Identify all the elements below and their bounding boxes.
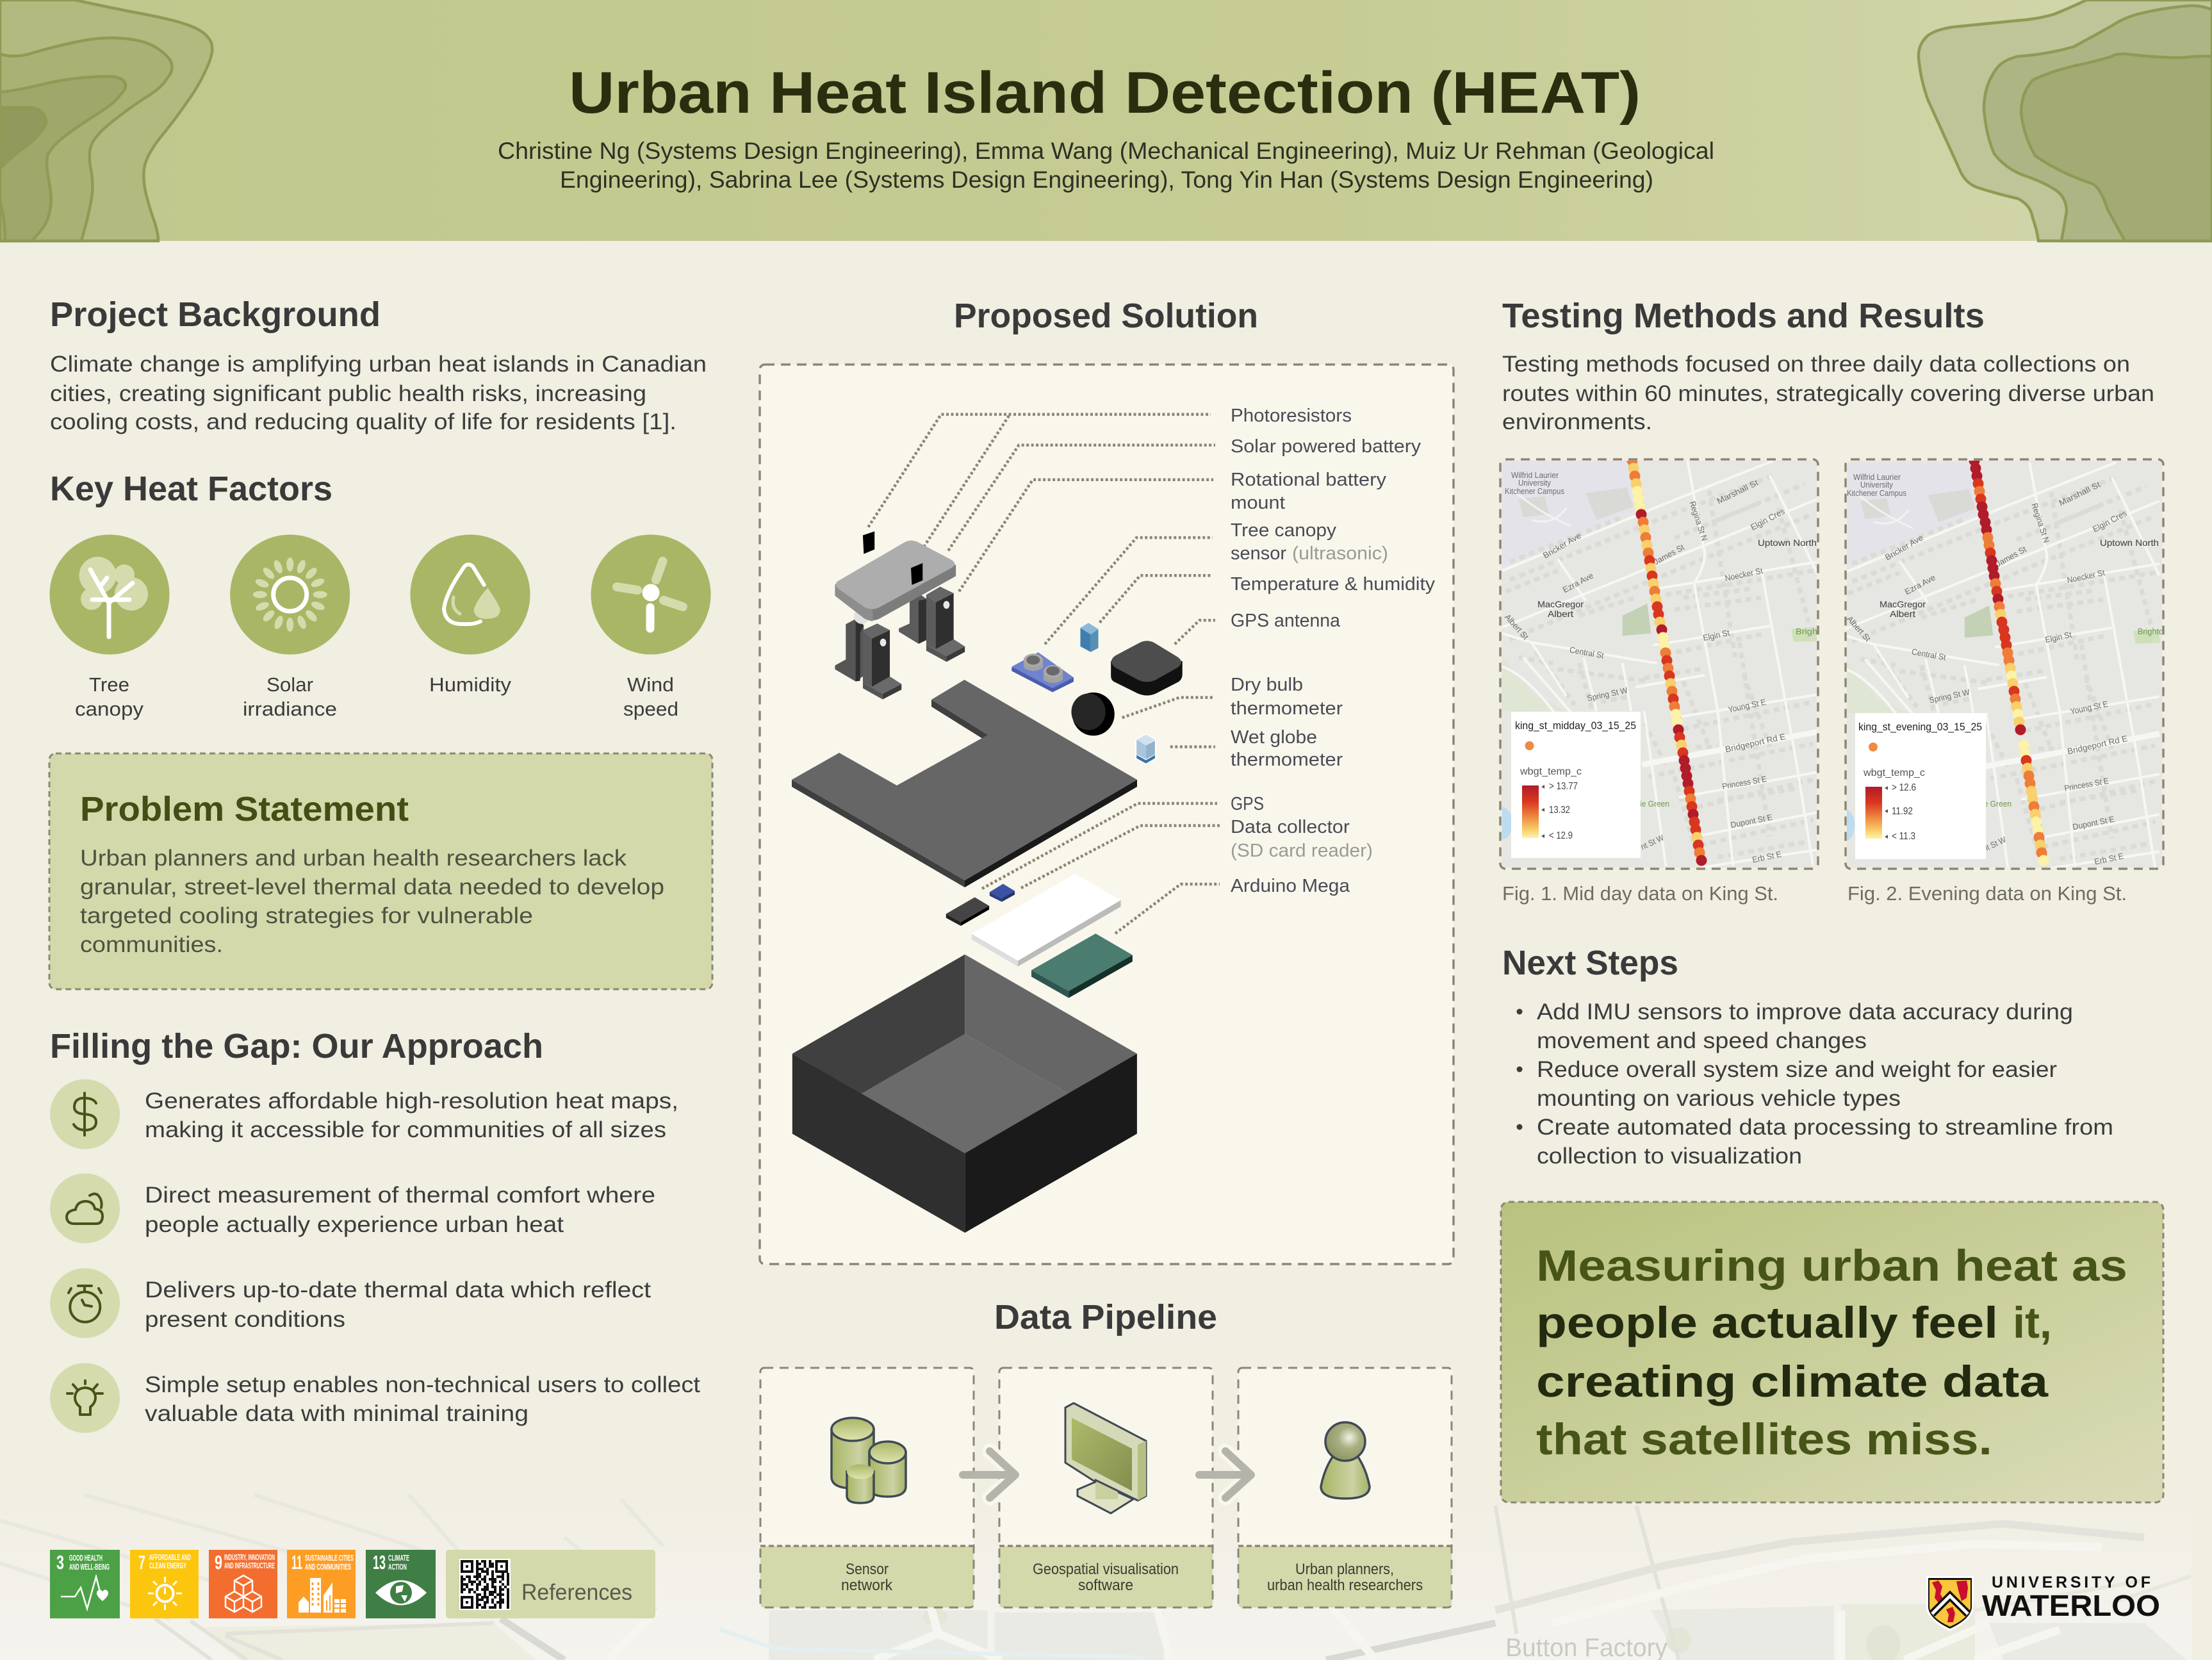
GPS antenna <box>1111 641 1183 696</box>
panel: our approach <box>50 1027 700 1433</box>
map labels: Noecker St <box>2066 568 2106 585</box>
internal components <box>792 874 1137 1233</box>
label: Urban planners, <box>1295 1561 1394 1578</box>
map labels: Dupont St E <box>2072 814 2115 832</box>
panel: problem statement <box>49 753 712 989</box>
step: end users <box>1238 1368 1452 1607</box>
bullet list: mounting on various vehicle types <box>1537 1086 1901 1111</box>
icon: solar irradiance <box>230 534 350 655</box>
authors <box>498 138 1714 193</box>
text: affordable: making it accessible for communities of all sizes <box>145 1117 666 1142</box>
caption: figure 2: Fig. 2. Evening data on King St. <box>1847 882 2127 905</box>
icon: tree canopy <box>50 534 169 655</box>
callout: key message: people actually feel <box>1536 1298 1998 1347</box>
heading: data pipeline: Data Pipeline <box>994 1298 1217 1336</box>
map labels: Albert St <box>1503 612 1531 641</box>
map labels: Dupont St E <box>1730 812 1773 830</box>
front right leg <box>926 587 965 662</box>
component labels <box>1231 406 1436 896</box>
map labels: Spring St W <box>1928 687 1971 705</box>
caption: figure 1: Fig. 1. Mid day data on King St. <box>1502 882 1778 905</box>
text: up-to-date <box>145 1278 651 1332</box>
bullet list: Add IMU sensors to improve data accuracy during <box>1537 999 2073 1024</box>
map labels: Bricker Ave <box>1541 530 1583 560</box>
text: up-to-date: Delivers up-to-date thermal data which reflect <box>145 1278 651 1303</box>
badge: SDG 11: 11 <box>291 1551 302 1574</box>
map labels: Regina St N <box>1688 500 1710 542</box>
component labels: GPS <box>1231 794 1264 814</box>
map labels: Central St <box>1569 645 1605 661</box>
map labels: MacGregor <box>1537 599 1584 609</box>
label: Geospatial visualisation <box>1033 1561 1179 1578</box>
map labels: Kitchener Campus <box>1847 488 1906 498</box>
map labels: ie Green <box>1982 799 2011 809</box>
front left leg <box>863 623 901 700</box>
paragraph <box>50 352 707 434</box>
callout: key message: that satellites miss. <box>1536 1415 1992 1464</box>
Arduino Mega <box>1031 933 1133 998</box>
component labels: Rotational battery <box>1231 470 1387 490</box>
map labels: Marshall St <box>1715 477 1760 506</box>
component labels: mount <box>1231 493 1285 513</box>
temperature route <box>1627 455 1707 866</box>
bullet list: collection to visualization <box>1537 1144 1802 1169</box>
panel: next steps <box>1502 944 2113 1169</box>
label <box>841 1561 893 1594</box>
step: sensor network <box>760 1368 974 1607</box>
map labels: University <box>1860 480 1893 489</box>
icon: dollar <box>50 1079 120 1149</box>
paragraph: Testing methods focused on three daily data collections on <box>1502 352 2130 377</box>
problem text <box>80 846 664 957</box>
icon: person <box>1321 1422 1370 1499</box>
legend <box>1511 712 1641 858</box>
GPS module <box>946 897 989 926</box>
leader lines <box>868 415 1215 747</box>
badge: SDG 9: AND INFRASTRUCTURE <box>224 1561 275 1570</box>
problem text: targeted cooling strategies for vulnerable <box>80 903 533 928</box>
icon: light bulb <box>50 1363 120 1433</box>
arrow: software to users <box>1199 1451 1251 1498</box>
badge: SDG 11: SUSTAINABLE CITIES <box>305 1553 354 1563</box>
label: solar irradiance: irradiance <box>243 698 337 720</box>
badge: SDG 7 <box>130 1550 199 1618</box>
map labels: nt St W <box>1639 832 1666 851</box>
map labels: Ezra Ave <box>1561 571 1595 595</box>
temperature route <box>1969 455 2049 866</box>
legend: > 12.6 <box>1892 782 1916 793</box>
map labels: Princess St E <box>2063 776 2110 793</box>
component labels: (ultrasonic) <box>1292 543 1388 564</box>
legend: > 13.77 <box>1549 781 1578 792</box>
badge: SDG 3: AND WELL-BEING <box>69 1562 110 1572</box>
map labels: Spring St W <box>1586 685 1629 703</box>
mount assembly <box>835 531 965 700</box>
panel: project background <box>50 295 707 434</box>
panel: testing methods <box>1502 297 2154 434</box>
map labels: Bridgeport Rd E <box>1725 732 1787 754</box>
badge: SDG 11 <box>287 1550 356 1618</box>
arrow: sensors to software <box>963 1451 1015 1498</box>
map labels <box>1503 470 1820 865</box>
map labels: Albert St <box>1845 614 1873 643</box>
label: solar irradiance <box>243 673 337 720</box>
map labels: Bridgeport Rd E <box>2067 734 2129 756</box>
text: direct measurement <box>145 1183 655 1237</box>
component labels: sensor <box>1231 543 1286 564</box>
panel: data pipeline flow <box>760 1368 1452 1607</box>
component labels: Dry bulb <box>1231 675 1303 695</box>
map labels: Bricker Ave <box>1883 532 1925 562</box>
badge: SDG 9: INDUSTRY, INNOVATION <box>224 1552 275 1562</box>
map labels: nt St W <box>1981 834 2008 853</box>
label <box>1033 1561 1179 1594</box>
badge: SDG 7: 7 <box>138 1551 145 1574</box>
label: humidity: Humidity <box>429 673 512 696</box>
bullet list <box>1517 999 2113 1169</box>
map labels: Wilfrid Laurier <box>1853 472 1901 482</box>
dry bulb thermometer <box>1071 693 1115 735</box>
map labels: Erb St E <box>1751 849 1782 865</box>
heading: Problem Statement <box>80 790 409 828</box>
heading: Filling the Gap: Our Approach <box>50 1027 543 1065</box>
map labels <box>1845 472 2163 867</box>
icon: humidity <box>410 534 530 655</box>
component labels: Temperature & humidity <box>1231 574 1436 595</box>
component labels: thermometer <box>1231 698 1343 719</box>
badge: SDG 3: 3 <box>56 1551 64 1574</box>
callout: key message: it, <box>2013 1298 2052 1347</box>
badge: SDG 13: 13 <box>373 1551 386 1574</box>
component labels: GPS antenna <box>1231 611 1341 631</box>
legend: 13.32 <box>1549 805 1570 816</box>
component labels: Data collector <box>1231 817 1350 837</box>
label: tree canopy: canopy <box>75 698 144 720</box>
component labels: Arduino Mega <box>1231 876 1350 896</box>
badge: SDG 3 <box>50 1550 120 1618</box>
map labels: MacGregor <box>1880 599 1926 609</box>
logo: University of Waterloo: WATERLOO <box>1982 1589 2160 1622</box>
ultrasonic sensor <box>1012 652 1074 692</box>
panel: key heat factors <box>50 470 711 720</box>
map labels: Elgin Cres <box>1749 506 1787 532</box>
map labels: Princess St E <box>1721 774 1767 791</box>
text: simple setup: Simple setup enables non-technical users to collect <box>145 1372 700 1397</box>
QR code <box>459 1559 511 1610</box>
text: direct measurement: people actually experience urban heat <box>145 1212 564 1237</box>
legend: king_st_midday_03_15_25 <box>1515 719 1636 732</box>
text: up-to-date: present conditions <box>145 1307 345 1332</box>
references label: References <box>521 1580 632 1605</box>
map labels: Marshall St <box>2057 479 2102 508</box>
map labels: ie Green <box>1640 799 1669 809</box>
label: wind speed <box>623 673 678 720</box>
problem text: Urban planners and urban health researchers lack <box>80 846 627 871</box>
step: geospatial software <box>999 1368 1213 1607</box>
text: simple setup: valuable data with minimal training <box>145 1401 528 1426</box>
wet globe thermometer <box>1136 735 1155 764</box>
map: midday King St <box>1499 458 1819 870</box>
crest <box>1926 1576 1974 1631</box>
temperature humidity sensor <box>1080 623 1099 652</box>
base plate <box>792 680 1137 887</box>
badge: SDG 13: ACTION <box>388 1562 407 1572</box>
component labels: Solar powered battery <box>1231 436 1421 457</box>
map labels: James St <box>1994 544 2028 569</box>
references card <box>446 1550 655 1618</box>
logo: University of Waterloo <box>1926 1574 2160 1631</box>
title: Urban Heat Island Detection (HEAT) <box>569 60 1641 126</box>
heading: Key Heat Factors <box>50 470 332 508</box>
callout: key message <box>1501 1202 2163 1502</box>
icon: cylinders <box>832 1418 906 1503</box>
text: simple setup <box>145 1372 700 1426</box>
topographic contours right <box>1919 0 2212 241</box>
sensors <box>1012 623 1183 764</box>
label: software <box>1078 1577 1133 1594</box>
badge: SDG 7: CLEAN ENERGY <box>149 1561 186 1570</box>
component labels: Photoresistors <box>1231 406 1352 426</box>
paragraph: routes within 60 minutes, strategically covering diverse urban <box>1502 381 2154 406</box>
label: tree canopy <box>75 673 144 720</box>
background street map <box>0 1493 2192 1660</box>
bullet list: movement and speed changes <box>1537 1028 1867 1053</box>
label: Sensor <box>846 1561 889 1578</box>
label: wind speed: speed <box>623 698 678 720</box>
badge: SDG 9: 9 <box>215 1551 222 1574</box>
label: urban health researchers <box>1267 1577 1423 1594</box>
map labels: Elgin St <box>2044 630 2073 645</box>
component labels: Tree canopy <box>1231 520 1337 541</box>
legend: wbgt_temp_c <box>1863 768 1925 778</box>
header banner <box>0 0 2212 241</box>
badge: SDG 3: GOOD HEALTH <box>69 1553 102 1563</box>
text: direct measurement: Direct measurement of thermal comfort where <box>145 1183 655 1208</box>
icon: wind speed <box>591 534 711 655</box>
SD card reader <box>990 883 1015 902</box>
component labels: thermometer <box>1231 750 1343 770</box>
callout: key message: creating climate data <box>1536 1357 2049 1406</box>
map labels: James St <box>1652 542 1686 567</box>
solar battery plate <box>835 541 956 621</box>
legend <box>1855 713 1986 859</box>
paragraph: environments. <box>1502 409 1652 434</box>
map labels: Uptown North <box>2100 538 2159 548</box>
map labels: Central St <box>1911 646 1947 662</box>
map labels: Kitchener Campus <box>1505 486 1564 496</box>
topographic contours left <box>0 0 212 241</box>
heading: Project Background <box>50 295 381 334</box>
photoresistors <box>863 531 922 585</box>
badge: SDG 13 <box>366 1550 436 1618</box>
component labels: (SD card reader) <box>1231 841 1373 861</box>
label: solar irradiance: Solar <box>266 673 313 696</box>
map labels: Albert <box>1548 609 1573 619</box>
heading: Next Steps <box>1502 944 1678 982</box>
icon: monitor <box>1065 1403 1146 1513</box>
map labels: Bright <box>1796 627 1820 636</box>
wordmark: UNIVERSITY OF <box>1992 1574 2151 1591</box>
bullet list: Reduce overall system size and weight for easier <box>1537 1057 2057 1082</box>
badge: SDG 9 <box>209 1550 277 1618</box>
map labels: Young St E <box>1727 697 1767 714</box>
SDG badges <box>50 1550 655 1618</box>
badge: SDG 7: AFFORDABLE AND <box>149 1552 191 1562</box>
map labels: Elgin St <box>1702 628 1731 643</box>
white battery <box>972 874 1121 966</box>
authors: Engineering), Sabrina Lee (Systems Design Engineering), Tong Yin Han (Systems Design Engineering) <box>560 167 1653 193</box>
legend: < 12.9 <box>1549 830 1573 841</box>
panel: exploded device diagram <box>760 365 1454 1264</box>
legend: 11.92 <box>1892 806 1913 817</box>
legend: wbgt_temp_c <box>1520 766 1582 777</box>
rear legs <box>835 594 927 682</box>
label: network <box>841 1577 893 1594</box>
map labels: Young St E <box>2069 699 2109 716</box>
map labels: Ezra Ave <box>1903 573 1937 596</box>
legend: < 11.3 <box>1892 831 1915 842</box>
text: affordable <box>145 1089 678 1142</box>
paragraph: Climate change is amplifying urban heat islands in Canadian <box>50 352 707 377</box>
map labels: Albert <box>1890 609 1915 619</box>
icon: stopwatch <box>50 1269 120 1338</box>
callout: key message: Measuring urban heat as <box>1536 1241 2127 1290</box>
legend: king_st_evening_03_15_25 <box>1858 721 1982 733</box>
paragraph: cooling costs, and reducing quality of life for residents [1]. <box>50 409 676 434</box>
problem text: granular, street-level thermal data needed to develop <box>80 875 664 900</box>
problem text: communities. <box>80 932 223 957</box>
component labels: Wet globe <box>1231 727 1317 748</box>
map: evening King St <box>1844 458 2165 870</box>
label: tree canopy: Tree <box>89 673 129 696</box>
paragraph: cities, creating significant public health risks, increasing <box>50 381 646 406</box>
map labels: Wilfrid Laurier <box>1511 470 1559 480</box>
heading: proposed solution: Proposed Solution <box>954 297 1258 335</box>
label: wind speed: Wind <box>627 673 674 696</box>
text: affordable: Generates affordable high-resolution heat maps, <box>145 1089 678 1114</box>
map labels: Uptown North <box>1758 538 1817 548</box>
map labels: Noecker St <box>1724 566 1764 583</box>
enclosure box <box>792 955 1137 1233</box>
map labels: Brighto <box>2138 627 2163 636</box>
icon: cloud <box>50 1174 120 1243</box>
label <box>1267 1561 1423 1594</box>
heading: Testing Methods and Results <box>1502 297 1985 335</box>
map labels: Elgin Cres <box>2091 508 2129 534</box>
badge: SDG 13: CLIMATE <box>388 1553 409 1563</box>
bullet list: Create automated data processing to streamline from <box>1537 1115 2113 1140</box>
shaft <box>854 608 869 624</box>
map labels: Erb St E <box>2093 851 2124 867</box>
paragraph <box>1502 352 2154 434</box>
map labels: University <box>1518 478 1551 488</box>
map labels: Regina St N <box>2030 502 2052 544</box>
authors: Christine Ng (Systems Design Engineering), Emma Wang (Mechanical Engineering), Muiz Ur Rehman (Geological <box>498 138 1714 164</box>
badge: SDG 11: AND COMMUNITIES <box>305 1562 351 1572</box>
